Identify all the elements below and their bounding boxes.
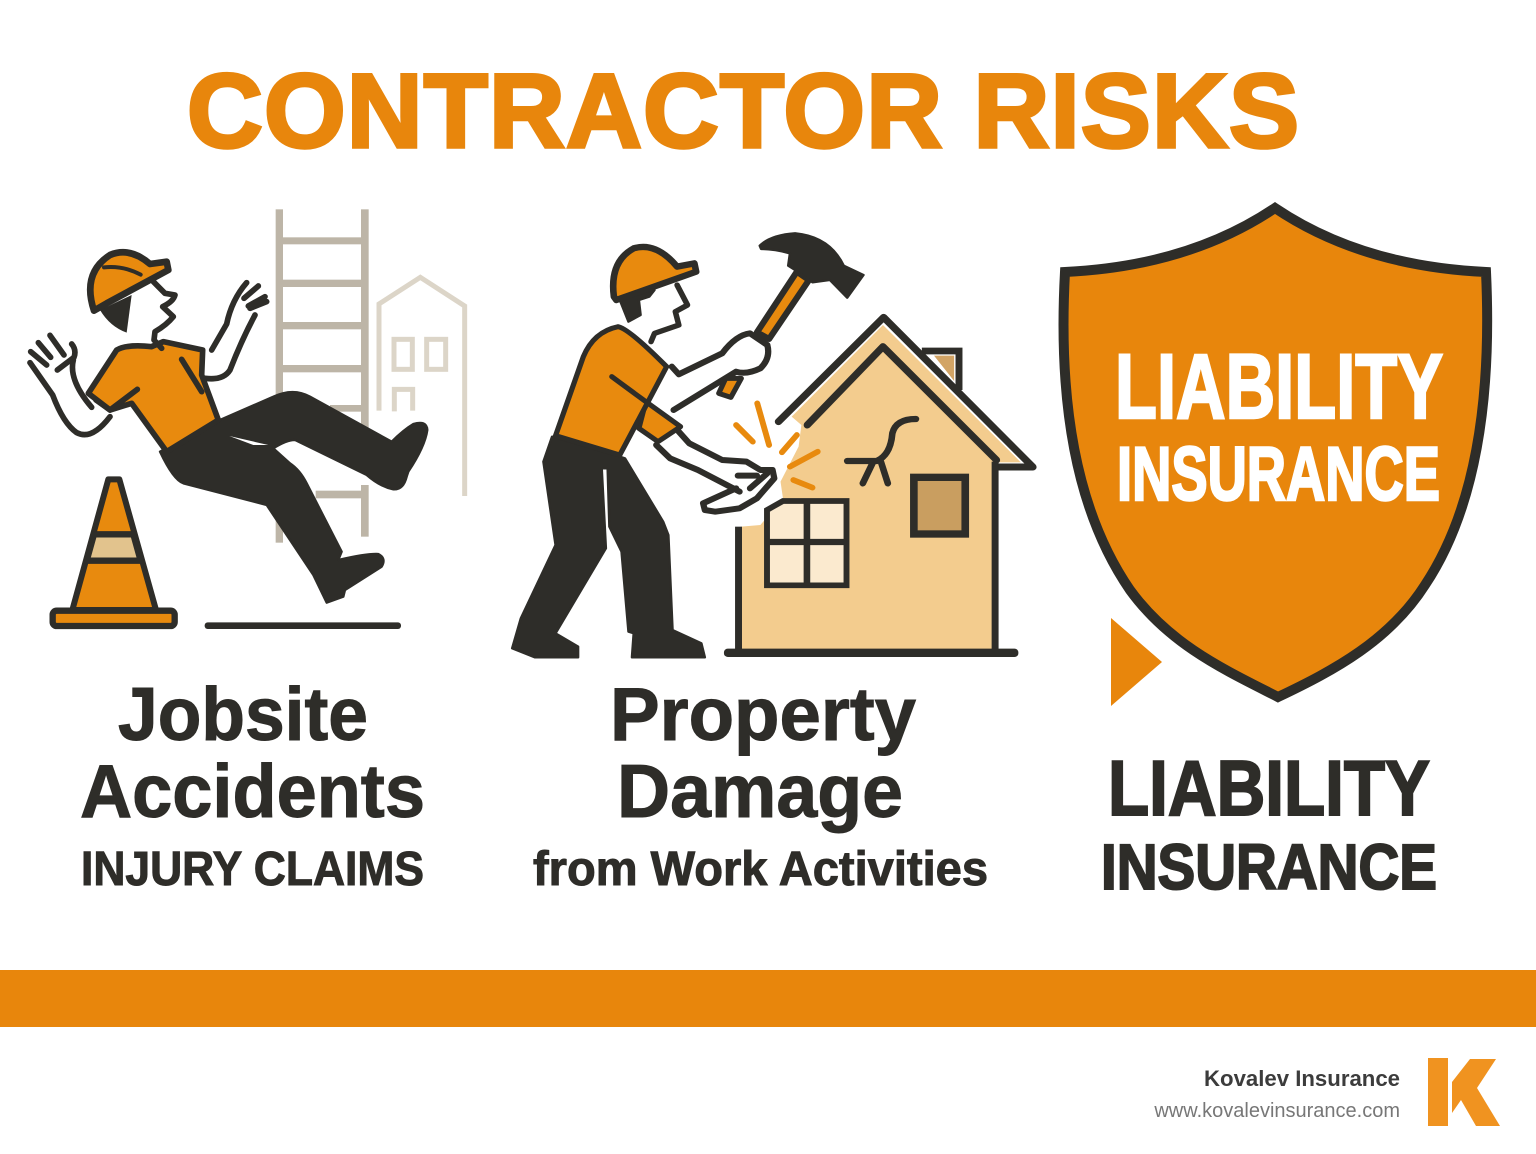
hammer handle [757, 272, 809, 339]
panel: jobsite accidents illustration [30, 209, 465, 629]
hammer grip end [719, 378, 741, 397]
ladder [276, 209, 369, 543]
orange shirt [556, 327, 681, 455]
trousers and boots [160, 392, 427, 603]
caption: liability insurance [1101, 744, 1437, 903]
hammer head [760, 233, 864, 298]
wall crack [847, 419, 916, 483]
caption: property damage: Property [610, 672, 916, 756]
hair [620, 290, 655, 322]
panel: liability insurance shield [1064, 208, 1487, 697]
panel: property damage illustration [512, 233, 1033, 657]
caption: property damage: Damage [617, 749, 903, 833]
hard hat [90, 252, 168, 311]
website: www.kovalevinsurance.com [1153, 1100, 1400, 1122]
traffic cone [53, 479, 175, 626]
house wall [741, 325, 1021, 650]
orange footer band [0, 970, 1536, 1027]
caption: liability insurance: LIABILITY [1108, 744, 1430, 832]
arms and hands [656, 333, 774, 512]
cross-pane window [767, 501, 847, 585]
roof [778, 317, 1033, 467]
caption: jobsite accidents [80, 672, 425, 896]
shield shape [1064, 208, 1487, 697]
square window [914, 477, 965, 534]
house walls and base [724, 462, 1018, 657]
ground line [205, 622, 401, 629]
caption: liability insurance: INSURANCE [1101, 831, 1437, 903]
hard hat [613, 247, 696, 300]
caption: jobsite accidents: Accidents [80, 749, 425, 833]
impact sparks [736, 403, 818, 488]
right arm and hand [205, 283, 267, 379]
caption: property damage [533, 672, 988, 896]
caption: property damage: from Work Activities [533, 843, 988, 896]
orange shirt [88, 342, 218, 452]
logo: K [1428, 1058, 1500, 1126]
hair [100, 295, 132, 333]
title: CONTRACTOR RISKS [187, 53, 1299, 170]
arrow marker [1111, 618, 1162, 706]
caption: jobsite accidents: INJURY CLAIMS [81, 843, 424, 896]
caption: jobsite accidents: Jobsite [118, 672, 368, 756]
face outline [153, 282, 175, 348]
company name: Kovalev Insurance [1204, 1066, 1400, 1091]
left arm and hand [30, 335, 110, 435]
face outline [651, 285, 687, 342]
trousers and boots [512, 437, 705, 657]
background building [379, 277, 465, 496]
chimney [922, 351, 959, 390]
